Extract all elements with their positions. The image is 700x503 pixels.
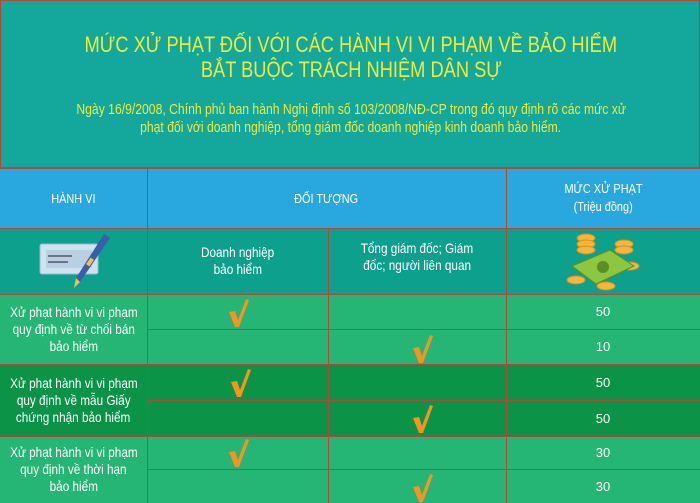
behavior text 3: Xử phạt hành vi vi phạm xyxy=(10,444,137,460)
behavior text 2: quy định về mẫu Giấy xyxy=(17,392,130,408)
subtitle xyxy=(76,102,626,136)
check 1a xyxy=(229,299,249,327)
behavior text 2: chứng nhận bảo hiểm xyxy=(16,408,131,424)
behavior text 2: Xử phạt hành vi vi phạm xyxy=(10,374,137,390)
group 2 xyxy=(0,364,700,436)
header: muc xu phat: (Triệu đồng) xyxy=(573,199,633,214)
label: tong giam doc xyxy=(361,240,473,273)
value 10: 10 xyxy=(596,339,610,354)
check 1b xyxy=(413,335,433,363)
check 3b xyxy=(413,474,433,502)
label: tong giam doc: đốc; người liên quan xyxy=(363,257,471,273)
title: BẮT BUỘC TRÁCH NHIỆM DÂN SỰ xyxy=(200,57,502,82)
header: doi tuong: ĐỐI TƯỢNG xyxy=(295,190,358,206)
check 3a xyxy=(229,439,249,467)
title: MỨC XỬ PHẠT ĐỐI VỚI CÁC HÀNH VI VI PHẠM VỀ BẢO HIỂM xyxy=(85,32,617,57)
behavior text 1: quy định về từ chối bán xyxy=(12,320,135,336)
behavior text 3: bảo hiểm xyxy=(49,478,98,494)
group 1 xyxy=(0,294,700,364)
header: hanh vi: HÀNH VI xyxy=(51,190,96,206)
label: doanh nghiep bao hiem: Doanh nghiệp xyxy=(201,244,274,260)
icon: cheque and pen xyxy=(40,234,110,288)
label: doanh nghiep bao hiem xyxy=(201,244,274,277)
behavior text 2 xyxy=(10,374,137,425)
group 3 xyxy=(0,436,700,503)
header panel xyxy=(0,0,700,168)
behavior text 3: quy định về thời hạn xyxy=(20,461,127,477)
behavior text 1: Xử phạt hành vi vi phạm xyxy=(10,304,137,320)
table header row xyxy=(0,168,700,228)
header: muc xu phat: MỨC XỬ PHẠT xyxy=(564,181,642,196)
value 50: 50 xyxy=(596,410,610,426)
value 30: 30 xyxy=(596,478,610,494)
check 2a xyxy=(231,369,251,397)
icon row xyxy=(0,228,700,294)
value 30: 30 xyxy=(596,445,610,460)
icon: money and coins xyxy=(566,234,640,290)
behavior text 1: bảo hiểm xyxy=(49,338,98,354)
value 50: 50 xyxy=(596,374,610,390)
label: doanh nghiep bao hiem: bảo hiểm xyxy=(213,261,262,277)
behavior text 1 xyxy=(10,304,137,354)
subtitle: Ngày 16/9/2008, Chính phủ ban hành Nghị định số 103/2008/NĐ-CP trong đó quy định rõ các mức xử xyxy=(76,102,626,118)
subtitle: phạt đối với doanh nghiệp, tổng giám đốc doanh nghiệp kinh doanh bảo hiểm. xyxy=(140,120,562,136)
behavior text 3 xyxy=(10,444,137,494)
title xyxy=(85,32,617,82)
check 2b xyxy=(413,405,433,433)
value 50: 50 xyxy=(596,304,610,319)
header: muc xu phat xyxy=(564,181,642,214)
label: tong giam doc: Tổng giám đốc; Giám xyxy=(361,240,473,256)
